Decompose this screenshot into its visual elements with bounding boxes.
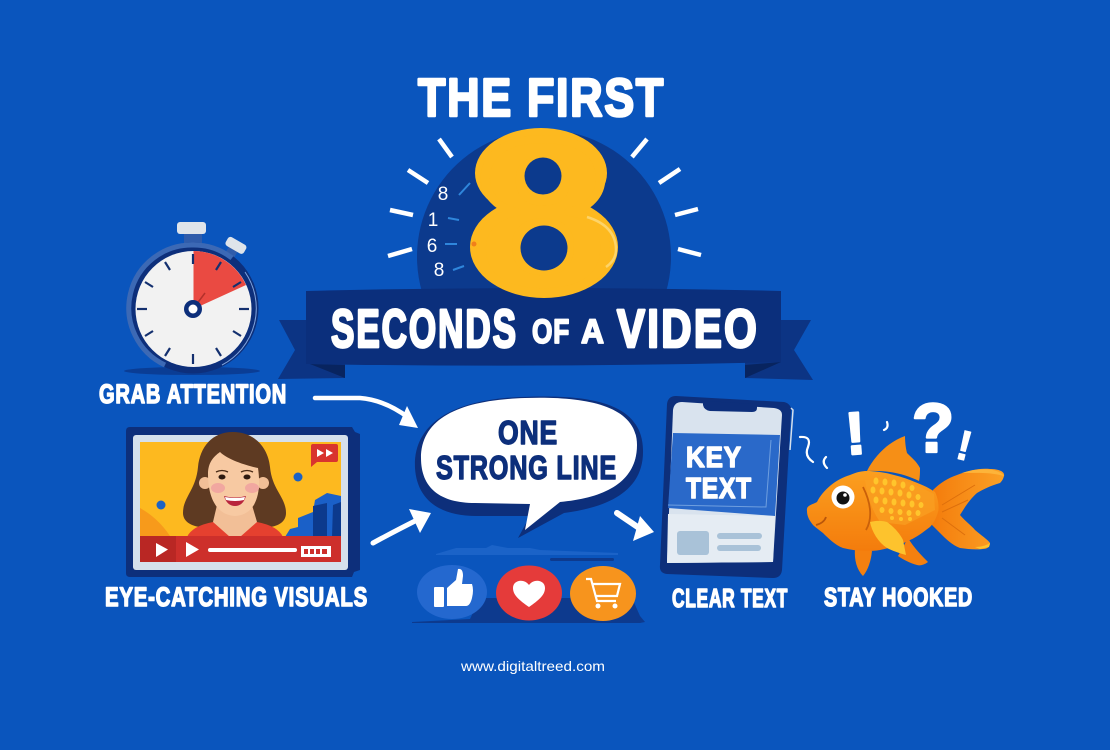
confused marks around the fish: ? — [912, 389, 954, 467]
icon: heart — [496, 566, 562, 620]
banner text: seconds of a video: SECONDS — [331, 299, 518, 359]
phone text: key text: KEY — [686, 442, 742, 474]
arrow: grab attention to speech bubble — [315, 398, 418, 428]
ribbon banner — [278, 288, 813, 380]
bubble text: one strong line — [436, 414, 617, 486]
illustration: smiling woman — [183, 432, 286, 537]
icon: goldfish — [807, 436, 1004, 576]
confused marks around the fish: ! — [843, 399, 868, 468]
banner text: seconds of a video: VIDEO — [617, 299, 759, 359]
big yellow eight: 8 — [473, 94, 613, 336]
fins — [867, 436, 920, 481]
tail — [932, 469, 1004, 549]
reaction icons row — [412, 545, 645, 623]
eye — [832, 486, 854, 508]
pectoral fin — [870, 521, 906, 555]
arrow: visuals to speech bubble — [373, 509, 431, 543]
label: grab attention: GRAB ATTENTION — [99, 379, 287, 409]
scales — [870, 478, 924, 521]
banner text: seconds of a video: A — [581, 313, 604, 351]
blue skyline — [285, 493, 341, 537]
rays around the eight — [388, 139, 701, 256]
platform shadow — [436, 545, 618, 555]
label: eye-catching visuals: EYE-CATCHING VISUALS — [105, 582, 368, 612]
speech bubble — [415, 396, 643, 538]
banner text: seconds of a video: OF — [532, 313, 570, 351]
arrow: speech bubble to phone — [617, 513, 654, 541]
icon: shopping cart — [570, 566, 636, 621]
confused marks around the fish — [800, 389, 977, 470]
dial numbers and ticks: 6 — [427, 236, 437, 257]
navy dial circle — [417, 130, 671, 292]
icon: red chat badge — [311, 444, 338, 467]
body — [807, 471, 939, 551]
video control bar — [140, 536, 341, 562]
phone text: key text: TEXT — [686, 473, 752, 505]
dial numbers and ticks: 8 — [438, 184, 448, 205]
dial numbers and ticks: 8 — [434, 260, 444, 281]
banner text: seconds of a video — [331, 299, 759, 359]
label: stay hooked: STAY HOOKED — [824, 582, 973, 612]
icon: stopwatch — [124, 222, 260, 375]
dial numbers and ticks: 1 — [428, 210, 438, 231]
label: clear text: CLEAR TEXT — [672, 583, 788, 613]
video player card — [126, 427, 360, 577]
bubble text: one strong line: STRONG LINE — [436, 449, 617, 486]
icon: phone with key text — [660, 396, 793, 578]
dial numbers and ticks — [427, 183, 470, 281]
icon: thumbs up — [417, 565, 487, 619]
bubble text: one strong line: ONE — [498, 414, 558, 451]
phone text: key text — [686, 442, 752, 505]
title: the first: THE FIRST — [418, 68, 665, 128]
footer url: www.digitaltreed.com — [460, 658, 605, 674]
confused marks around the fish: ! — [952, 421, 977, 470]
